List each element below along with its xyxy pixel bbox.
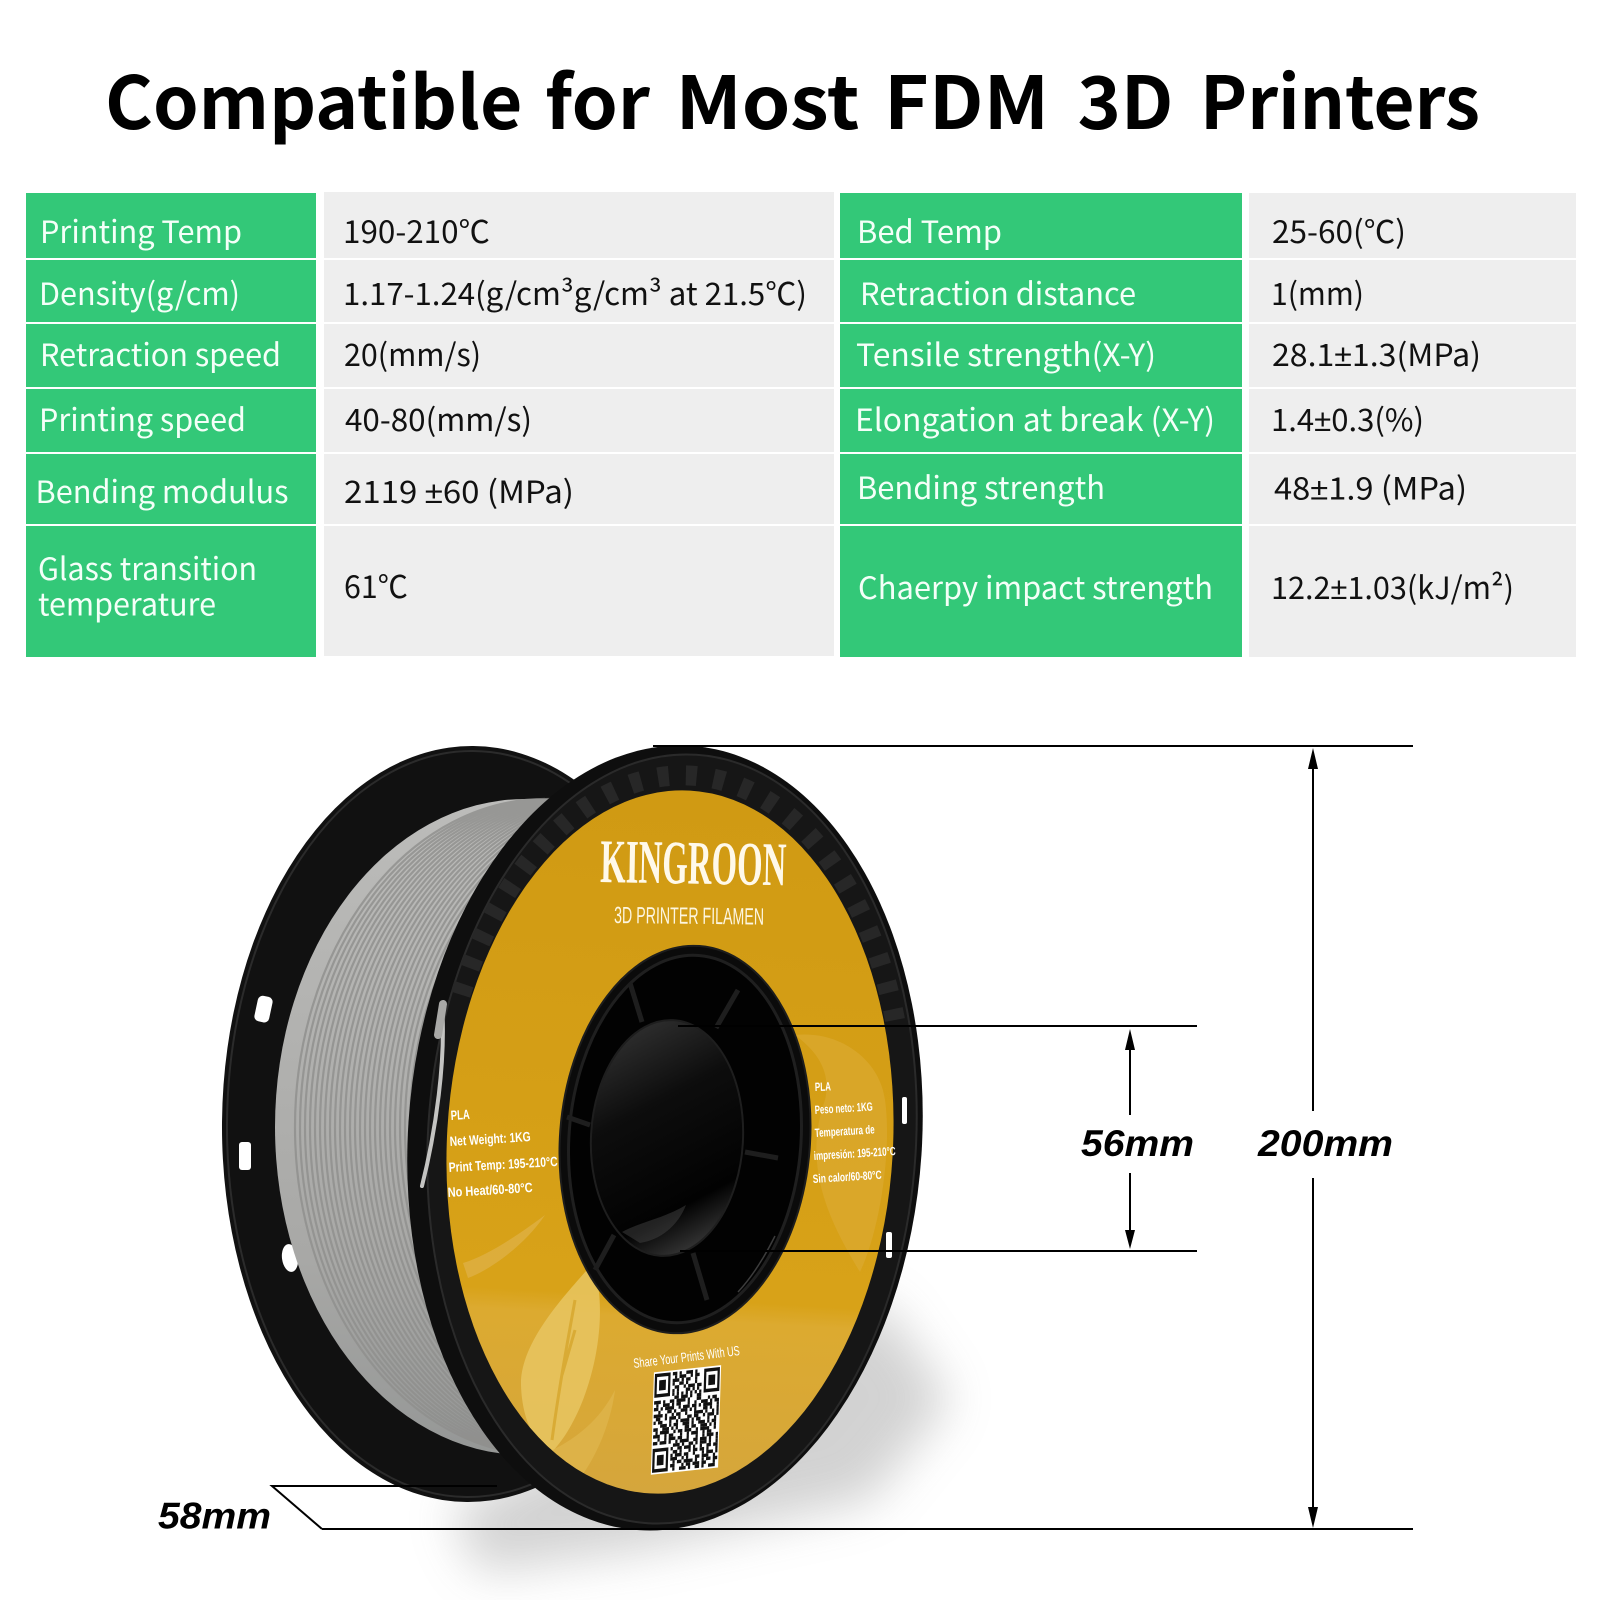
dimension: 56mm [678,1026,1197,1251]
right label text: Sin calor/60-80°C [812,1168,882,1186]
title: FDM [884,45,1049,151]
panel: column 1 values [324,192,834,656]
panel: column 1 labels: Retraction speed [40,330,281,375]
panel: column 2 labels: Elongation at break (X-Y) [855,395,1215,440]
left label text: Net Weight: 1KG [449,1129,531,1149]
title [105,45,1480,151]
dimension: 56mm: 56mm [1081,1123,1194,1164]
panel: column 2 values: 48±1.9 (MPa) [1274,464,1467,508]
panel: column 1 values: 190-210℃ [343,207,490,252]
panel: column 2 values: 1(mm) [1271,269,1364,314]
panel: column 2 values: 25-60(℃) [1272,207,1406,252]
spokes [567,983,778,1300]
panel: column 1 values: 2119 ±60 (MPa) [344,467,574,512]
back flange [219,744,721,1504]
right label text: PLA [815,1079,831,1094]
title: Compatible [105,45,522,151]
panel: column 1 values: 61℃ [344,562,408,607]
hub core [585,1016,749,1260]
panel: column 1 labels [26,193,316,657]
icon: filament clip [422,1004,443,1186]
right label text: impresión: 195-210°C [813,1144,896,1163]
specification table [26,192,1576,657]
icon: flange notches [239,995,300,1273]
dimension: 200mm [322,746,1413,1529]
left label text: PLA [450,1107,470,1123]
panel: column 2 labels: Retraction distance [860,269,1136,314]
panel: column 2 values: 12.2±1.03(kJ/m²) [1271,563,1514,608]
panel: column 2 labels: Bed Temp [857,207,1002,252]
dimension: 200mm: 200mm [1257,1123,1393,1164]
panel: column 2 labels [840,193,1242,657]
spool shadow [450,1300,950,1572]
panel: column 2 labels: Tensile strength(X-Y) [856,330,1156,375]
icon: QR code [651,1365,721,1475]
panel: column 2 values: 28.1±1.3(MPa) [1272,330,1481,375]
panel: column 2 labels: Chaerpy impact strength [858,563,1213,608]
subtitle: 3D PRINTER FILAMEN [614,902,764,930]
panel: column 2 values [1249,193,1576,657]
filament spool illustration [219,729,947,1547]
panel: column 1 values: 1.17-1.24(g/cm³g/cm³ at 21.5℃) [343,269,807,314]
panel: column 1 labels: Printing Temp [40,207,242,252]
spool hub [546,937,824,1342]
title: for [545,45,650,151]
panel: column 1 labels: Glass transition [38,544,257,589]
dimension: 58mm: 58mm [158,1496,271,1536]
left label text [447,1107,558,1200]
panel: column 1 values: 20(mm/s) [344,330,481,375]
panel: column 1 values: 40-80(mm/s) [345,395,532,440]
title: Most [676,45,860,151]
icon: right notches [886,1097,907,1258]
right label text: Temperatura de [814,1122,875,1140]
title: 3D [1078,45,1174,151]
filament windings [275,799,700,1455]
icon: label leaves [463,1034,887,1490]
front flange [407,747,923,1530]
panel: column 2 labels: Bending strength [857,463,1105,508]
left label text: No Heat/60-80°C [447,1180,533,1200]
panel: column 1 labels: Density(g/cm) [39,269,240,314]
share caption: Share Your Prints With US [633,1343,741,1371]
brand name: KINGROON [600,828,787,899]
panel: column 2 values: 1.4±0.3(%) [1271,395,1424,440]
panel: column 1 labels: Bending modulus [36,467,288,512]
panel: column 1 labels: temperature [38,580,216,624]
panel: column 1 labels: Printing speed [39,395,246,440]
dimension: 58mm [158,1486,497,1536]
right label text [812,1079,896,1186]
panel: gold label [446,790,896,1494]
title: Printers [1200,45,1480,151]
left label text: Print Temp: 195-210°C [448,1154,558,1175]
right label text: Peso neto: 1KG [814,1099,873,1117]
